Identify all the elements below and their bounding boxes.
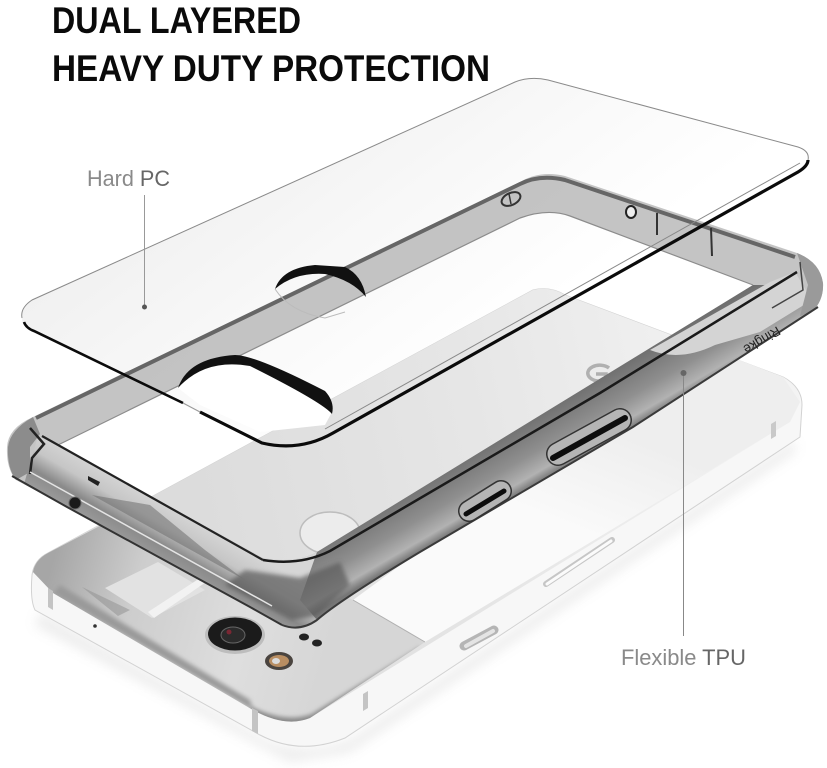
plate outline rim (22, 78, 808, 318)
flash amber (269, 655, 289, 667)
case body (7, 174, 823, 628)
power button top (547, 541, 611, 584)
bottom corner dark (225, 562, 350, 620)
glass lower section (33, 505, 425, 722)
inner left edge (42, 436, 263, 560)
case camera cutout (178, 355, 333, 432)
slot ellipse (499, 189, 523, 209)
google logo (588, 365, 609, 381)
hard pc leader line (144, 195, 146, 306)
flash ring (265, 652, 293, 670)
tpu marker (680, 370, 686, 376)
left corner inner shape (30, 428, 44, 474)
flash highlight (272, 658, 280, 664)
volume button top (466, 631, 493, 646)
outer long edge (282, 307, 818, 628)
title line two: HEAVY DUTY PROTECTION (52, 48, 490, 89)
phone back face (33, 289, 800, 722)
rail separator three (363, 691, 368, 711)
callout: flexible tpu (621, 370, 746, 670)
cutout interior (178, 356, 333, 432)
long side band (300, 285, 812, 620)
plate short edge faint join (183, 403, 200, 412)
right corner body (797, 253, 823, 316)
long side light highlight (650, 272, 812, 355)
plate thick short edge (24, 322, 183, 403)
plate cutout crescent (275, 265, 366, 297)
hard pc plate fill (22, 78, 808, 446)
hard pc label: Hard PC (87, 166, 170, 191)
sensor dot one (299, 634, 309, 640)
power button on rail (546, 540, 612, 584)
tpu leader line (682, 374, 684, 636)
rail separator four (771, 421, 776, 439)
volume slot opening (466, 491, 504, 514)
hard pc marker (142, 304, 147, 310)
phone side rail (31, 289, 802, 746)
rail separator two (252, 708, 258, 734)
phone (31, 289, 802, 762)
white back panel below case (353, 345, 800, 642)
glass left rim shading (53, 585, 253, 710)
reflection bar (148, 578, 206, 618)
power slot fill (558, 420, 620, 454)
plate thick long edge (200, 160, 808, 446)
flexible tpu case (7, 174, 823, 628)
brand text: Ringke (741, 323, 783, 357)
second left edge line (30, 472, 272, 606)
tpu label: Flexible TPU (621, 645, 746, 670)
plate cutout lower line (275, 289, 345, 318)
left corner body (8, 417, 40, 480)
headphone port (69, 497, 81, 509)
title (52, 0, 490, 89)
flash (265, 652, 293, 670)
microphone hole (93, 624, 97, 628)
lower left band (24, 436, 330, 628)
rail separator one (48, 588, 53, 610)
power slot frame (558, 420, 620, 454)
dark reflection (82, 587, 130, 616)
port slit (88, 476, 100, 486)
camera slot top (499, 189, 523, 209)
volume slot fill (469, 491, 501, 511)
right corner outline (772, 262, 803, 308)
outer left edge (12, 476, 282, 625)
camera lens (208, 618, 262, 650)
sensor dot two (312, 640, 322, 646)
volume button on rail (464, 630, 494, 646)
inner long edge (263, 272, 797, 562)
camera ring (205, 616, 265, 654)
fingerprint ring (300, 512, 360, 554)
volume slot frame (469, 491, 501, 511)
power button edge (546, 540, 612, 584)
cutout black crescent (178, 355, 333, 414)
power button slot (553, 418, 625, 458)
top ridge marks (657, 213, 712, 256)
window reflection strip (105, 562, 205, 618)
lens red dot (226, 630, 232, 634)
lower band light strip (92, 495, 245, 580)
callout: hard pc (87, 166, 170, 310)
power slot opening (553, 418, 625, 458)
plate long edge highlight (325, 163, 800, 429)
lens glint (221, 627, 245, 643)
title line one: DUAL LAYERED (52, 0, 301, 41)
upper band inner line (58, 212, 753, 445)
volume button slot (466, 491, 504, 514)
glass divider line (353, 600, 425, 642)
glass lower rim shading (250, 647, 424, 728)
volume button edge (464, 630, 494, 646)
camera (205, 616, 265, 654)
top band dark rim (36, 178, 795, 418)
phone shadow (35, 440, 795, 762)
slot divider (509, 194, 511, 204)
hard pc plate edges (22, 78, 808, 446)
top hole (626, 206, 636, 218)
glass details (53, 562, 424, 728)
